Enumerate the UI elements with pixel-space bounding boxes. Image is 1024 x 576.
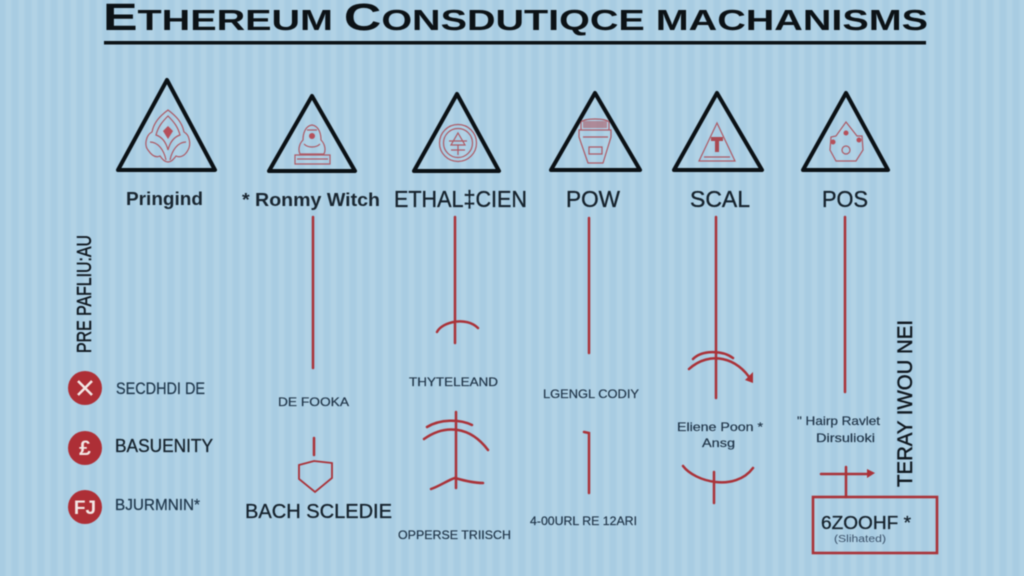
connector line [312, 217, 314, 368]
icon: triangle emblem 3 [414, 94, 499, 171]
caption: De Fooka: DE FOOKA [278, 395, 349, 409]
legend item: Basuenity [68, 431, 213, 465]
icon: triangle emblem 1 [118, 80, 215, 170]
caption: Lgengl Codiy: LGENGL CODIY [543, 387, 639, 401]
panel: column 2 Ronmy Witch [242, 96, 392, 523]
caption: Thyteleand: THYTELEAND [409, 375, 498, 389]
caption: Opperse Triisch: OPPERSE TRIISCH [398, 528, 511, 542]
label: POS: POS [822, 186, 868, 212]
connector line [844, 217, 846, 392]
icon: shield with stem [299, 438, 332, 492]
panel: column 3 Ethal [394, 94, 527, 542]
label: Ethal: ETHAL‡CIEN [394, 186, 527, 212]
label: Pringind: Pringind [126, 189, 203, 209]
icon: triangle emblem 5 [674, 93, 762, 170]
icon: triangle emblem 4 [551, 93, 640, 170]
panel: column 1 Pringind [118, 80, 215, 209]
caption: Hairp Ravlet Dirsulioki [797, 414, 881, 445]
label: POW: POW [566, 186, 620, 212]
connector with arc [437, 217, 478, 343]
legend item: Secdhdi: SECDHDI DE [116, 379, 205, 398]
icon: arcs and stem [424, 412, 488, 489]
panel: column 5 SCAL [674, 93, 763, 503]
callout box: 6ZOOHF * [821, 513, 911, 533]
caption: Hairp Ravlet Dirsulioki: " Hairp Ravlet [797, 414, 881, 428]
label: SCAL: SCAL [690, 186, 750, 212]
left vertical label: PRE PAFLIU:AU [74, 235, 96, 353]
caption: 4-00URL RE 12ARI: 4-00URL RE 12ARI [530, 514, 637, 528]
icon: lower arc with stem [683, 466, 753, 503]
caption: Bach Scledie: BACH SCLEDIE [245, 501, 392, 523]
callout box: (Slihated) [834, 534, 886, 545]
icon: short line [584, 432, 589, 493]
arrow to box [821, 467, 875, 497]
icon: triangle emblem 6 [803, 93, 888, 170]
connector line [588, 218, 590, 353]
caption: Eliene Poon Ansg: Eliene Poon * [677, 420, 763, 434]
legend item: Bjurmnin: FJ [74, 498, 96, 519]
caption: Hairp Ravlet Dirsulioki: Dirsulioki [816, 431, 875, 445]
legend item: Bjurmnin [68, 490, 200, 524]
connector with arrow arcs [689, 217, 753, 398]
legend item: Basuenity: £ [79, 437, 91, 460]
legend item: Basuenity: BASUENITY [115, 436, 213, 456]
right vertical label: TERAY IWOU NEI [894, 320, 917, 487]
legend [68, 371, 213, 524]
panel: column 4 POW [530, 93, 640, 528]
icon: triangle emblem 2 [269, 96, 355, 171]
callout box [813, 497, 937, 553]
legend item: Secdhdi [68, 371, 205, 405]
caption: Eliene Poon Ansg [677, 420, 763, 450]
label: Ronmy Witch: * Ronmy Witch [242, 190, 380, 210]
caption: Eliene Poon Ansg: Ansg [702, 436, 735, 450]
legend item: Bjurmnin: BJURMNIN* [115, 497, 200, 514]
panel: column 6 POS [797, 93, 937, 553]
